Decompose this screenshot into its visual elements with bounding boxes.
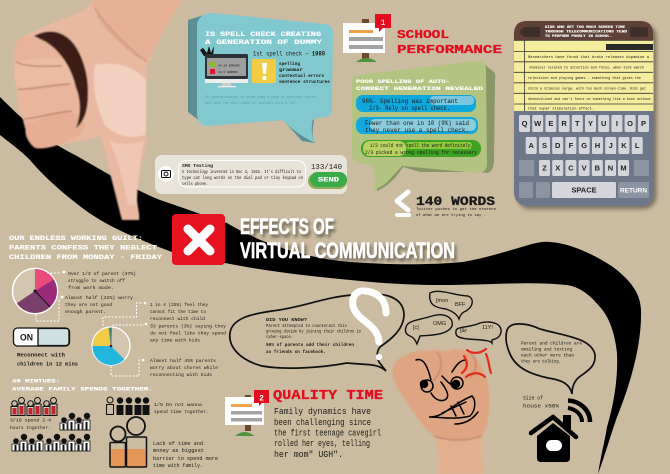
- text: chat slang: [moo: [436, 298, 448, 304]
- text: family dynamics: her mom" UGH".: [274, 450, 343, 460]
- list of checks: sentence structures: [279, 79, 330, 85]
- text: pie callouts: Over 1/3 of parent (37%): [68, 271, 136, 277]
- text: reconnect: Reconnect with: [17, 352, 65, 358]
- heading: working guilt: [9, 235, 162, 261]
- heading: working guilt: CHILDREN FROM MONDAY - FRIDAY: [9, 254, 162, 261]
- text: 3/10: hours together.: [10, 425, 51, 431]
- keyboard: X: [555, 164, 560, 172]
- panel: SMS card: [155, 155, 347, 194]
- notepad: desensitized and can't focus on something like a book without: [528, 97, 651, 102]
- text: size of house: [523, 396, 560, 410]
- notepad: [514, 40, 654, 112]
- keyboard: N: [608, 164, 613, 172]
- keyboard: W: [534, 119, 542, 128]
- callout: 140 words: Twitter pushes to get the essence: [416, 207, 497, 212]
- keyboard: S: [542, 141, 547, 150]
- text: chat slang: [413, 298, 493, 334]
- stat: 96%: 96%- Spelling was important: [362, 98, 458, 105]
- main title: VIRTUAL COMMUNICATION: [240, 238, 455, 263]
- text: reconnect callouts: cannot fit the time to: [150, 309, 206, 315]
- pie chart: reconnect: [92, 327, 130, 365]
- heading: 49 minutes: [12, 378, 153, 392]
- text: reconnect callouts: reconnect with child: [150, 316, 205, 322]
- toggle: on: [14, 328, 70, 346]
- counter: 133/140: [311, 164, 342, 172]
- speech outline: did you know: [230, 291, 404, 371]
- text: reconnect callouts: any time with kids: [150, 338, 200, 344]
- keyboard: Z: [542, 164, 547, 172]
- keyboard: D: [555, 141, 561, 150]
- SMS text: type out long words on the dial pad or tiny keypad on: [182, 175, 303, 181]
- keyboard: A: [528, 141, 534, 150]
- angry symbol: [462, 349, 491, 377]
- keyboard: C: [568, 164, 574, 172]
- panel: auto-correct bubble: CORRECT GENERATION REVEALED: [356, 85, 484, 92]
- text: did you know: growing divide by joining their children in: [266, 330, 361, 334]
- text: reconnect callouts: [103, 302, 226, 378]
- text: did you know: Parent attempted to counteract this: [266, 324, 347, 329]
- keyboard: Q: [522, 119, 528, 128]
- text: reconnect: children in 12 mins: [17, 362, 78, 368]
- send button: SEND: [318, 176, 339, 184]
- text: reconnect callouts: worry about chores while: [150, 365, 218, 371]
- keyboard: Y: [588, 119, 593, 128]
- keyboard: V: [582, 164, 587, 172]
- text: family dynamics: [274, 407, 381, 460]
- text: lack of time: Lack of time and: [153, 441, 203, 447]
- send button: [308, 172, 347, 189]
- text: reconnect callouts: 33 parents (3%) saying they: [150, 324, 226, 330]
- heading: school performance: PERFORMANCE: [397, 43, 502, 57]
- keyboard: G: [581, 141, 587, 150]
- text: reconnect callouts: 1 in 4 (25%) feel they: [150, 302, 208, 308]
- speech outline: parents emailing: Parent and children are: [521, 340, 582, 346]
- SMS text: SMS Texting: [182, 163, 213, 169]
- phone header: [514, 21, 653, 40]
- icon: monitor with crown: 44.19 ERRORS: [218, 64, 240, 68]
- speech outline: parents emailing: each other more than: [521, 352, 574, 358]
- text: pie callouts: Almost half (42%) worry: [65, 295, 133, 301]
- heading: working guilt: PARENTS CONFESS THEY NEGLECT: [9, 244, 157, 252]
- pie chart: guilt: [12, 268, 58, 314]
- list of checks: contextual errors: [279, 73, 324, 79]
- main title: EFFECTS OF: [240, 214, 334, 239]
- text: lack of time: barrier to spend more: [153, 456, 218, 462]
- text: did you know: 50% of parents add their children: [266, 343, 354, 348]
- text: size of house: Size of: [523, 396, 543, 402]
- heading: 49 minutes: 49 MINTUES:: [12, 378, 60, 384]
- icon: sign 1: [343, 14, 391, 62]
- text: first spell check: 1st spell check – 1980: [253, 50, 325, 58]
- fingers: [14, 36, 68, 68]
- icons: black and white families: [12, 413, 90, 451]
- icon: monitor with crown: [200, 46, 248, 87]
- text: reconnect: [17, 352, 78, 368]
- text: pie callouts: enough parent.: [65, 309, 106, 315]
- heading: school performance: [397, 28, 502, 57]
- keyboard: B: [595, 164, 601, 172]
- panel: spell check speech bubble: [188, 13, 333, 143]
- stat: 9%: they never use a spell check.: [365, 127, 469, 134]
- icon: white question mark: [353, 291, 386, 360]
- icon: sign 2: [225, 390, 269, 436]
- heading: quality time: QUALITY TIME: [273, 388, 383, 404]
- list of checks: grammar: [279, 68, 303, 73]
- text: lack of time: [153, 441, 218, 469]
- SMS text: [182, 163, 303, 187]
- icon: exclamation: [252, 59, 276, 83]
- keyboard: SPACE: [571, 186, 597, 194]
- text: did you know: [266, 318, 361, 355]
- icon: wifi house: [531, 400, 590, 462]
- text: 3/10: 3/10 spend 2-4: [10, 418, 51, 424]
- text: family dynamics: the first teenage cavegirl: [274, 428, 381, 438]
- keyboard: J: [609, 141, 613, 150]
- text: did you know: DID YOU KNOW?: [266, 318, 307, 323]
- keyboard: RETURN: [620, 188, 647, 194]
- text: pie callouts: from work mode.: [68, 285, 114, 291]
- notepad: child a stimulus surge, with too much screen-time. Kids get: [528, 86, 646, 92]
- keyboard: P: [641, 119, 646, 128]
- text: 1/5: spend time together.: [154, 409, 209, 415]
- notepad: that super stimulation effect.: [528, 106, 594, 112]
- text: size of house: house x50%: [523, 404, 560, 410]
- stat: 9%: [356, 117, 478, 134]
- text: 1/5: [154, 402, 209, 415]
- caption: half with the spell check on, and half with it off.: [205, 101, 297, 106]
- keyboard: L: [635, 141, 640, 150]
- stat: 9%: Fewer than one in 10 (9%) said: [365, 120, 469, 127]
- panel: spell check speech bubble: A GENERATION OF DUMMY: [205, 39, 322, 46]
- text: pie callouts: struggle to switch off: [68, 278, 125, 284]
- notepad: chemical related to attention and focus, when kids watch: [529, 66, 644, 70]
- icon: camera: [158, 166, 174, 182]
- text: reconnect callouts: Almost half 45% parents: [150, 358, 216, 364]
- stat: spelling 1/3: 1/3 could not spell the word definitely.: [370, 143, 473, 149]
- phone header: KIDS WHO GET TOO MUCH SCREEN TIME: [545, 26, 625, 30]
- stat: spelling 1/3: 2/3 picked a wrong spelling for necessary: [365, 150, 478, 156]
- keyboard: T: [575, 119, 580, 128]
- panel: phone: [514, 21, 654, 206]
- heading: working guilt: OUR ENDLESS WORKING GUILT:: [9, 235, 143, 242]
- text: 1/5: 1/5 Do not wanna: [154, 402, 202, 408]
- callout: 140 words: 140 WORDS: [416, 195, 496, 209]
- photo: fist with angry face: [393, 349, 491, 474]
- speech bubbles: chat slang: [405, 291, 501, 344]
- heading: IS SPELL CHECK CREATING: [205, 31, 321, 38]
- heading: school performance: SCHOOL: [397, 28, 449, 42]
- SMS text: cells phone.: [182, 181, 208, 187]
- black swoosh band: [0, 97, 641, 474]
- notepad: Researchers have found that brain releases dopamine a: [528, 55, 650, 60]
- text: lack of time: money as biggest: [153, 448, 204, 454]
- icon: monitor with crown: 13.5 ERRORS: [218, 71, 238, 74]
- keyboard: F: [569, 141, 574, 150]
- toggle: on: ON: [20, 332, 33, 342]
- keyboard: H: [595, 141, 600, 150]
- icons: five people: [106, 397, 150, 415]
- text: family dynamics: been challenging since: [274, 418, 371, 428]
- callout: 140 words: of what we are trying to say .: [416, 213, 486, 218]
- heading: POOR SPELLING OF AUTO-: [356, 78, 450, 85]
- photo: thumbs-down hand: [14, 0, 182, 220]
- text: pie callouts: they are not good: [65, 302, 112, 308]
- text: lack of time: time with family.: [153, 463, 203, 469]
- text: pie callouts: [36, 271, 136, 321]
- caption: 32 undergraduates to proof-read a page of business letter -: [205, 95, 320, 100]
- icon: less-or-equal: [395, 192, 411, 217]
- stat: 96%: 2/3- Rely on spell check.: [369, 105, 450, 112]
- text: family dynamics: rolled her eyes, telling: [274, 439, 370, 449]
- speech outline: parents emailing: emailing and texting: [521, 346, 572, 352]
- text: chat slang: [&r: [460, 328, 467, 334]
- keyboard: E: [548, 119, 553, 128]
- stat: 96%: [356, 95, 476, 112]
- text: 3/10: [10, 418, 51, 431]
- phone header: TO PERFORM POORLY IN SCHOOL.: [545, 35, 612, 39]
- heading: 49 minutes: AVERAGE FAMILY SPENDS TOGETHER.: [12, 386, 153, 392]
- main title: [240, 214, 455, 263]
- keyboard: U: [601, 119, 606, 128]
- keyboard: [519, 115, 649, 198]
- text: reconnect callouts: reconnecting with kids: [150, 372, 212, 378]
- list of checks: spelling: [279, 61, 300, 67]
- stat: spelling 1/3: [361, 140, 481, 157]
- speech outline: parents emailing: they are talking.: [521, 358, 561, 364]
- SMS text: A technology invented in Dec 3, 1992. It's difficult to: [182, 169, 301, 175]
- text: chat slang: OMG: [433, 321, 446, 327]
- notepad: television and playing games - something that gives the: [528, 76, 641, 81]
- text: chat slang: 11Y!: [482, 325, 493, 331]
- text: did you know: as friends on facebook.: [266, 350, 326, 355]
- keyboard: K: [621, 141, 627, 150]
- icon: sign 1: 1: [381, 19, 386, 28]
- text: chat slang: [c]: [413, 325, 419, 331]
- phone header: THROUGH TELECOMMUNICATIONS TEND: [545, 30, 627, 34]
- text: family dynamics: Family dynamics have: [274, 407, 371, 417]
- icons: red families: [11, 398, 57, 416]
- text: chat slang: BFF: [455, 302, 466, 308]
- icon: red X box: [172, 214, 225, 265]
- callout: 140 words: [395, 192, 497, 218]
- angry face drawing: [416, 360, 478, 424]
- icon: two figures with orange fill: [110, 417, 146, 467]
- caption: [205, 95, 320, 106]
- keyboard: M: [620, 164, 627, 172]
- speech outline: parents emailing: [506, 324, 595, 394]
- keyboard: O: [627, 119, 633, 128]
- keyboard: R: [561, 119, 567, 128]
- panel: auto-correct bubble: [352, 61, 495, 191]
- text: reconnect callouts: do not feel like they spend: [150, 330, 226, 336]
- list of checks: [279, 61, 330, 85]
- icon: sign 2: 2: [259, 394, 264, 404]
- keyboard: I: [616, 119, 618, 128]
- text: did you know: cyber-space.: [266, 335, 293, 340]
